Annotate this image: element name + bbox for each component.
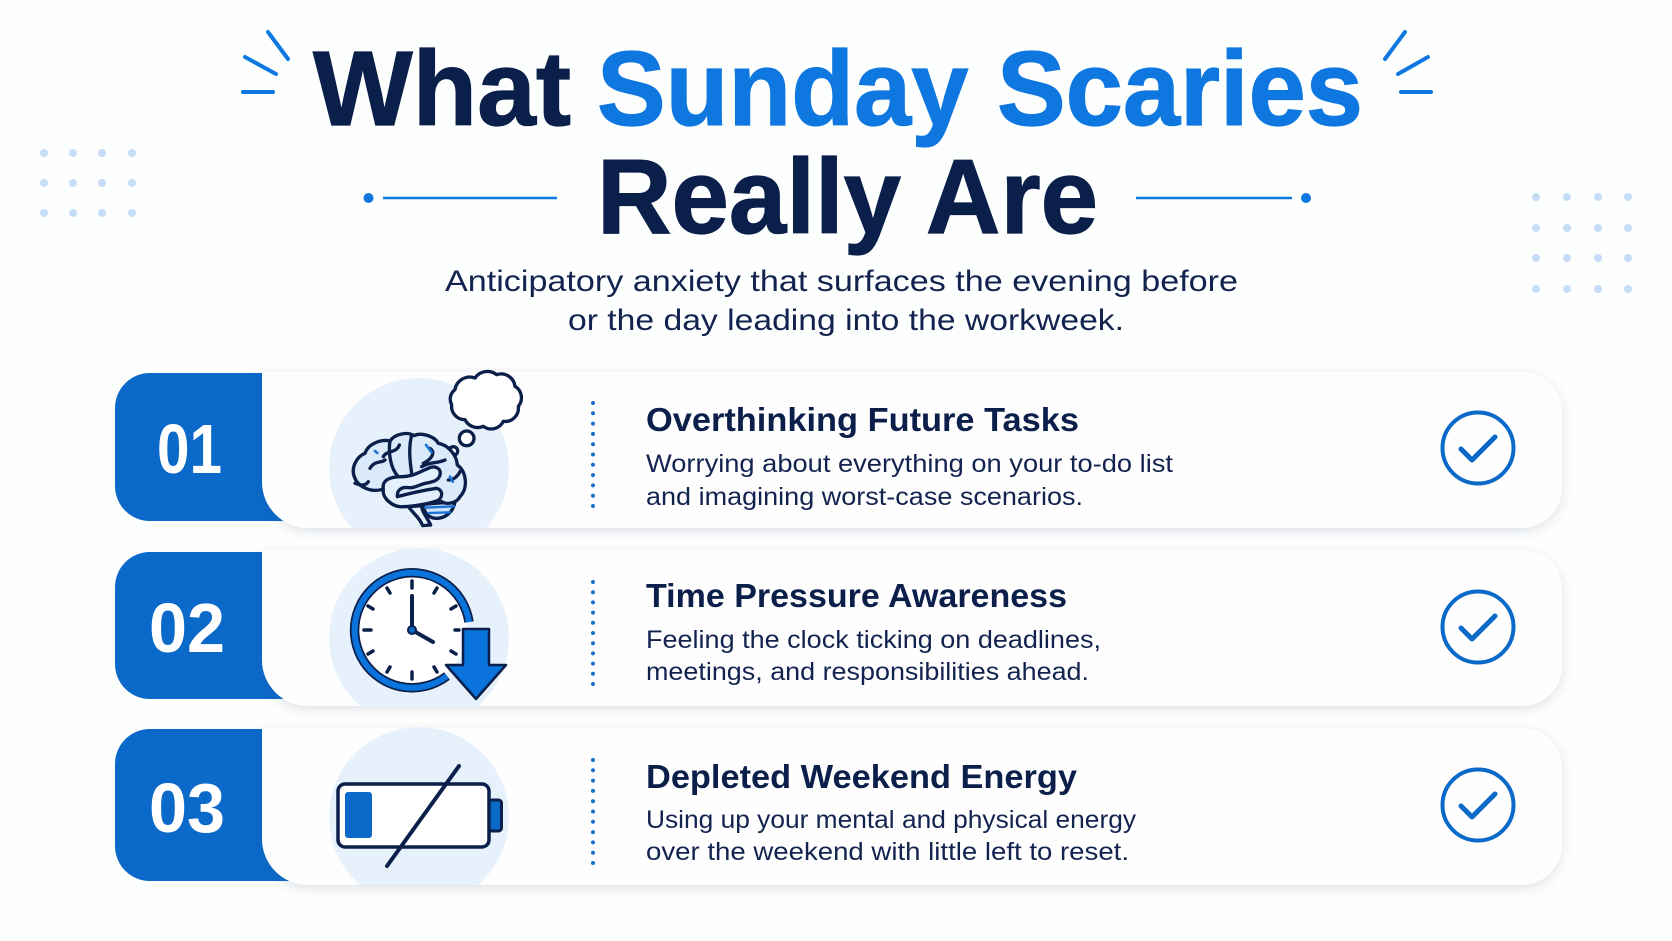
number badge 01: 01	[157, 410, 222, 488]
title	[313, 30, 1363, 256]
subtitle: or the day leading into the workweek.	[568, 304, 1124, 337]
icon circle 3	[329, 727, 509, 885]
icon: check 2	[1442, 592, 1514, 662]
icon: sparks right	[1385, 32, 1431, 92]
icon circle 1	[329, 378, 509, 528]
description 2: meetings, and responsibilities ahead.	[646, 658, 1089, 686]
title: Sunday Scaries	[597, 30, 1363, 148]
number badge 01	[115, 373, 310, 521]
title: Really Are	[597, 138, 1098, 256]
dotted divider 1	[591, 403, 595, 508]
divider right	[1136, 193, 1311, 203]
decorative dot grid left	[40, 149, 136, 217]
panel: row 3	[115, 727, 1562, 907]
number badge 02: 02	[149, 589, 225, 667]
dotted divider 3	[591, 760, 595, 864]
subtitle	[445, 265, 1238, 337]
description 3	[646, 806, 1137, 866]
description 3: over the weekend with little left to reset.	[646, 838, 1129, 866]
title: What	[313, 30, 571, 148]
dotted divider 2	[591, 582, 595, 685]
description 1	[646, 450, 1173, 511]
panel: row 2	[115, 548, 1562, 728]
number badge 03	[115, 729, 320, 881]
icon: sparks left	[243, 32, 288, 92]
icon circle 2	[329, 548, 509, 706]
panel: row 1	[115, 370, 1566, 535]
icon: clock with down arrow	[355, 573, 506, 699]
description 3: Using up your mental and physical energy	[646, 806, 1137, 834]
card 2	[262, 550, 1562, 706]
description 1: Worrying about everything on your to-do list	[646, 450, 1173, 478]
heading 3: Depleted Weekend Energy	[646, 758, 1078, 795]
number badge 02	[115, 552, 310, 699]
description 2	[646, 626, 1101, 686]
subtitle: Anticipatory anxiety that surfaces the evening before	[445, 265, 1238, 298]
description 2: Feeling the clock ticking on deadlines,	[646, 626, 1101, 654]
card 1	[262, 372, 1562, 528]
icon: depleted battery	[338, 766, 502, 866]
icon: brain with thought cloud	[353, 371, 521, 526]
heading 1: Overthinking Future Tasks	[646, 401, 1079, 438]
number badge 03: 03	[149, 769, 225, 847]
icon: check 3	[1442, 770, 1514, 840]
heading 2: Time Pressure Awareness	[646, 577, 1067, 614]
icon: check 1	[1442, 412, 1514, 484]
divider left	[364, 193, 557, 203]
card 3	[262, 728, 1562, 885]
decorative dot grid right	[1532, 193, 1632, 293]
description 1: and imagining worst-case scenarios.	[646, 483, 1083, 511]
